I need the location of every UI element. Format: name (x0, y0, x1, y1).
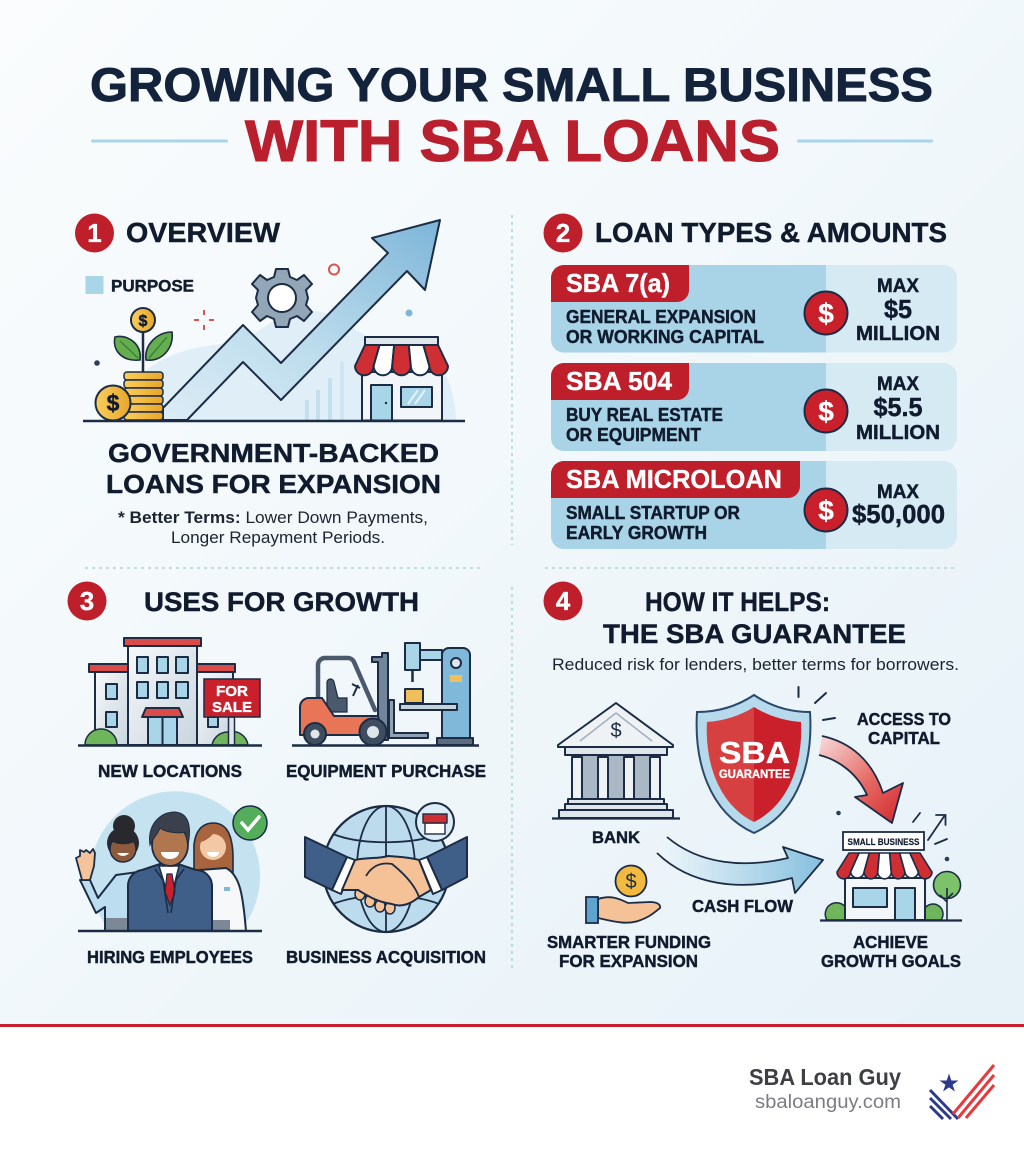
man center (128, 812, 212, 931)
overview headline: GOVERNMENT-BACKED (108, 438, 439, 468)
card: SBA 7(a): MAX (877, 276, 919, 297)
arrow: cash flow (657, 837, 823, 893)
card: SBA 7(a): MILLION (856, 323, 940, 345)
woman left (76, 815, 139, 931)
heading: how it helps: THE SBA GUARANTEE (603, 619, 906, 649)
footer url: sbaloanguy.com (755, 1092, 901, 1113)
icon: sba guarantee shield (697, 687, 835, 833)
icon: hiring employees (76, 791, 267, 931)
label: achieve growth goals: GROWTH GOALS (821, 951, 961, 971)
section number 4: 4 (556, 586, 571, 616)
title: WITH SBA LOANS (245, 109, 780, 174)
card: SBA 504: MILLION (856, 422, 940, 444)
label: bank: BANK (592, 828, 641, 847)
icon: small business store: SMALL BUSINESS (848, 837, 920, 847)
label: access to capital: CAPITAL (868, 728, 940, 748)
icon: hand with coin: $ (625, 871, 637, 893)
footer brand name: SBA Loan Guy (749, 1064, 901, 1090)
panel: overview (75, 214, 465, 547)
section number 4 (544, 582, 582, 620)
label: achieve growth goals (821, 932, 961, 971)
label: equipment purchase: EQUIPMENT PURCHASE (286, 761, 486, 781)
icon: small business store (820, 811, 962, 920)
card: SBA microloan: SBA MICROLOAN (566, 464, 782, 494)
overview headline (106, 438, 441, 499)
card: SBA 7(a): OR WORKING CAPITAL (566, 327, 764, 347)
label: business acquisition: BUSINESS ACQUISITION (286, 947, 486, 967)
section number 3: 3 (80, 586, 94, 616)
label: new locations: NEW LOCATIONS (98, 761, 242, 781)
icon: coin plant (96, 308, 172, 420)
card: SBA microloan: MAX (877, 482, 919, 503)
card: SBA 7(a): $5 (884, 294, 912, 324)
icon: forklift and machine (292, 643, 479, 746)
heading: how it helps (603, 587, 906, 649)
card: SBA 504: OR EQUIPMENT (566, 425, 701, 445)
card: SBA 7(a) (551, 265, 957, 352)
overview note: * Better Terms: Lower Down Payments, (118, 508, 428, 527)
footer (0, 1024, 1024, 1154)
heading: how it helps: HOW IT HELPS: (645, 587, 830, 617)
forklift (318, 658, 375, 710)
card: SBA 504: MAX (877, 374, 919, 395)
section number 1: 1 (87, 218, 102, 248)
icon: bank (552, 703, 680, 818)
globe (323, 806, 449, 932)
card: SBA 504 (551, 363, 957, 451)
icon: coin plant: $ (107, 390, 120, 416)
icon: bank: $ (610, 720, 622, 742)
label: smarter funding: SMARTER FUNDING (547, 932, 711, 952)
heading: uses for growth: USES FOR GROWTH (144, 587, 419, 617)
label: hiring employees: HIRING EMPLOYEES (87, 947, 253, 967)
section number 1 (75, 214, 114, 252)
icon: sba guarantee shield: SBA (719, 735, 790, 770)
card: SBA microloan: $ (818, 495, 834, 526)
card: SBA 7(a): SBA 7(a) (566, 268, 670, 298)
label: achieve growth goals: ACHIEVE (853, 932, 928, 952)
icon: sba guarantee shield: GUARANTEE (719, 769, 790, 781)
purpose legend: PURPOSE (111, 276, 194, 296)
check badge (233, 806, 267, 840)
overview note: Longer Repayment Periods. (171, 528, 385, 547)
logo (930, 1065, 994, 1119)
label: cash flow: CASH FLOW (692, 896, 793, 916)
machine (442, 648, 470, 738)
panel: loan types and amounts (544, 214, 957, 549)
icon: new locations building (78, 638, 262, 746)
title: GROWING YOUR SMALL BUSINESS (90, 58, 933, 111)
handshake (305, 837, 467, 914)
card: SBA 7(a): GENERAL EXPANSION (566, 307, 756, 327)
icon: business acquisition (305, 803, 467, 932)
woman right (194, 823, 246, 931)
icon: coin plant: $ (139, 313, 148, 330)
label: smarter funding: FOR EXPANSION (559, 951, 698, 971)
card: SBA microloan (551, 461, 957, 549)
card: SBA microloan: EARLY GROWTH (566, 523, 707, 543)
heading: loan types: LOAN TYPES & AMOUNTS (595, 217, 947, 248)
panel: uses for growth (68, 582, 486, 967)
for sale sign: SALE (212, 699, 252, 716)
section number 2: 2 (556, 218, 570, 248)
panel: how it helps (544, 582, 962, 971)
overview headline: LOANS FOR EXPANSION (106, 469, 441, 499)
icon: gear (252, 269, 312, 327)
icon: hand with coin (586, 866, 660, 923)
arrow: access to capital (819, 736, 903, 823)
label: access to capital (857, 709, 951, 748)
heading: overview: OVERVIEW (126, 217, 281, 248)
for sale sign: FOR (216, 683, 248, 700)
card: SBA 504: BUY REAL ESTATE (566, 405, 723, 425)
overview note (118, 508, 428, 547)
overview illustration (83, 220, 465, 421)
store badge (416, 803, 454, 841)
card: SBA 504: $ (818, 396, 834, 427)
section number 2 (544, 214, 582, 252)
card: SBA 504: SBA 504 (566, 366, 673, 396)
card: SBA 7(a): $ (818, 298, 834, 329)
icon: storefront (355, 337, 448, 420)
subheading: Reduced risk for lenders, better terms for borrowers. (552, 655, 959, 674)
card: SBA microloan: $50,000 (852, 499, 945, 529)
card: SBA microloan: SMALL STARTUP OR (566, 503, 740, 523)
label: smarter funding (547, 932, 711, 971)
section number 3 (68, 582, 106, 620)
for sale sign (204, 679, 260, 745)
title (90, 58, 933, 174)
card: SBA 504: $5.5 (874, 392, 922, 422)
label: access to capital: ACCESS TO (857, 709, 951, 729)
growth arrow (163, 220, 440, 420)
